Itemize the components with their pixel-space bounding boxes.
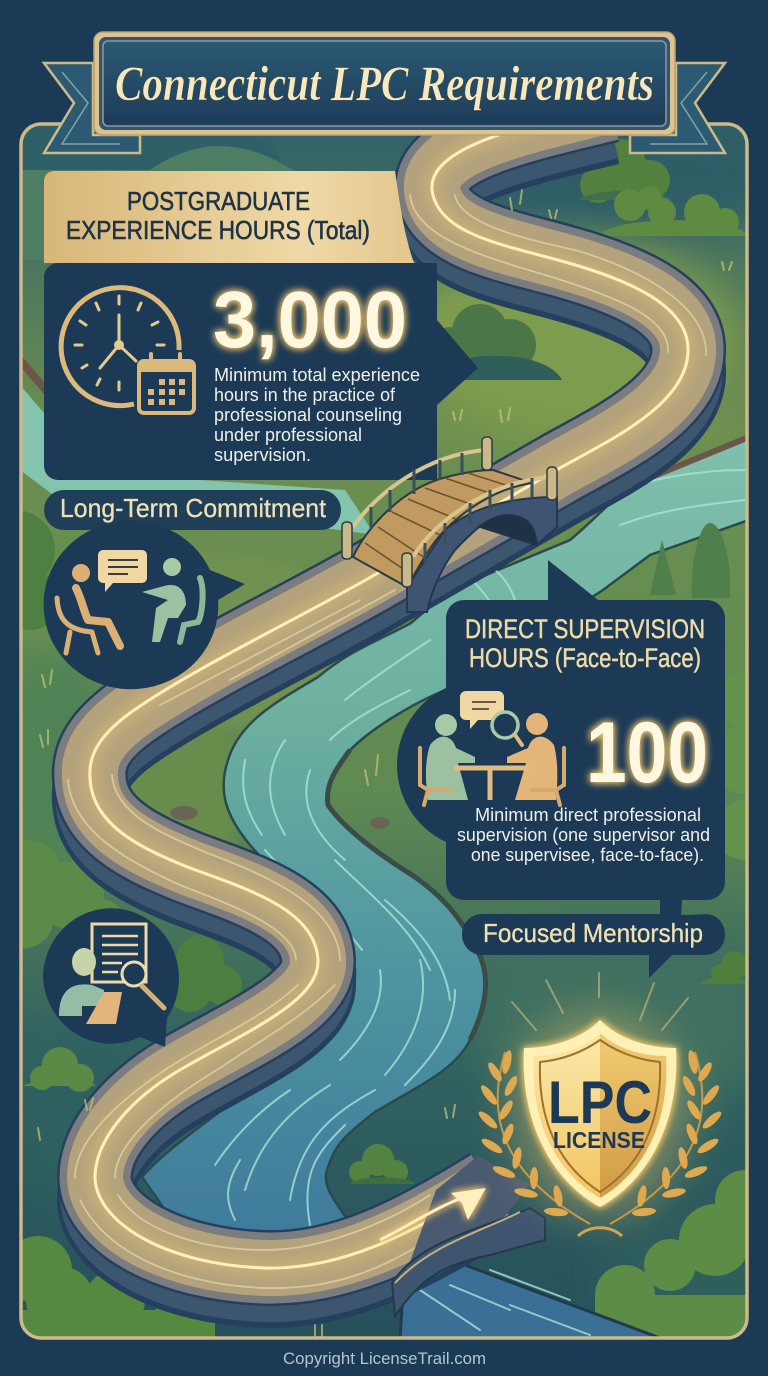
icon: clock and calendar xyxy=(61,288,194,413)
stone arch xyxy=(407,497,557,612)
river xyxy=(20,360,749,1338)
panel: postgraduate experience hours xyxy=(44,171,478,480)
lower stone bridge xyxy=(392,1208,545,1316)
icon: counseling session xyxy=(44,521,245,689)
description: professional counseling xyxy=(214,404,402,425)
winding road xyxy=(68,105,706,1290)
description: Minimum direct professional xyxy=(475,804,701,825)
section heading band: POSTGRADUATE xyxy=(127,186,310,216)
trees xyxy=(650,523,730,598)
grass tufts xyxy=(38,190,732,1340)
icon: document review xyxy=(43,908,179,1047)
heading: DIRECT SUPERVISION xyxy=(465,614,705,644)
deck xyxy=(353,470,532,587)
arrow on road xyxy=(380,1188,486,1240)
shield: LICENSE xyxy=(553,1127,645,1153)
stat: 3,000: 3,000 xyxy=(213,275,407,364)
rails xyxy=(353,450,550,557)
badge: LPC license xyxy=(476,973,724,1236)
description xyxy=(457,804,710,865)
panel: direct supervision hours: HOURS (Face-to-Face) xyxy=(469,643,701,673)
description: one supervisee, face-to-face). xyxy=(471,844,704,865)
copyright: Copyright LicenseTrail.com xyxy=(283,1350,486,1368)
section heading band xyxy=(44,171,414,263)
rocks xyxy=(170,806,390,829)
shield: LPC xyxy=(548,1069,652,1136)
description: hours in the practice of xyxy=(214,384,396,405)
description: supervision. xyxy=(214,444,311,465)
laurel wreath xyxy=(476,1049,724,1236)
section heading band: EXPERIENCE HOURS (Total) xyxy=(66,215,370,245)
wooden arched bridge xyxy=(342,437,557,612)
panel: direct supervision hours xyxy=(397,560,725,978)
shield xyxy=(524,1020,676,1207)
icon: supervisor and supervisee at table xyxy=(420,691,564,805)
title banner xyxy=(44,32,725,153)
callout: focused mentorship: Focused Mentorship xyxy=(483,918,703,948)
description: Minimum total experience xyxy=(214,364,420,385)
lower river segment xyxy=(398,1264,660,1336)
callout: long-term commitment: Long-Term Commitment xyxy=(60,493,327,523)
description: under professional xyxy=(214,424,362,445)
road end apron xyxy=(410,1156,530,1262)
title text: Connecticut LPC Requirements xyxy=(115,55,654,111)
description: supervision (one supervisor and xyxy=(457,824,710,845)
ribbon tails xyxy=(44,63,725,153)
light rays xyxy=(512,973,688,1030)
dark stat card xyxy=(44,263,478,480)
speech panel shape xyxy=(397,560,725,978)
description xyxy=(214,364,420,465)
stat: 100: 100 xyxy=(586,705,708,801)
